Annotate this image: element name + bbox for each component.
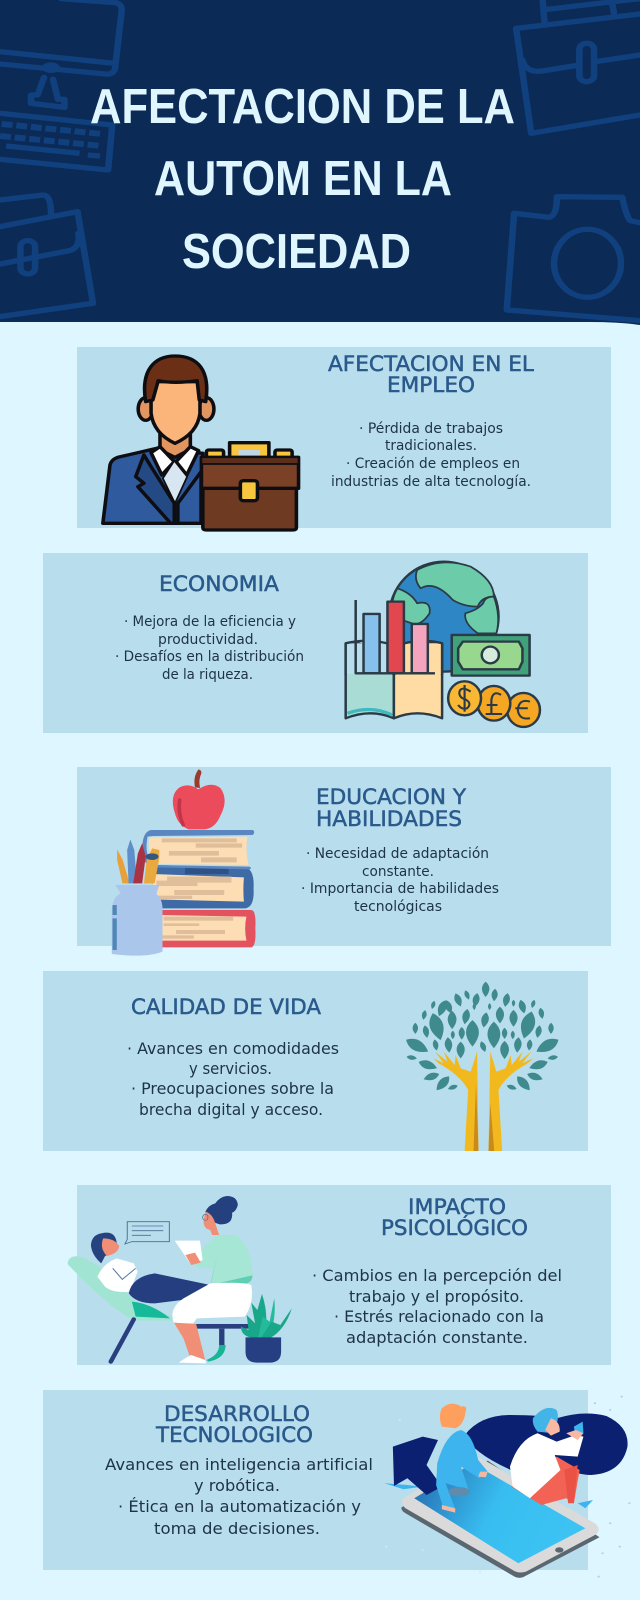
icon: therapist and patient [68,1196,292,1363]
heading: EDUCACION Y [316,785,467,810]
text block: · Estrés relacionado con la [334,1308,544,1326]
text block: · Cambios en la percepción del [312,1267,562,1285]
text block: adaptación constante. [346,1329,528,1347]
text block [105,1456,373,1538]
heading [155,1402,313,1448]
title [90,79,515,279]
icon: people on a smartphone [384,1396,631,1578]
panel: economia [43,553,588,733]
heading [328,352,534,398]
text block [127,1040,339,1119]
heading: CALIDAD DE VIDA [131,995,321,1020]
title: AUTOM EN LA [154,151,452,206]
text block: brecha digital y acceso. [139,1101,323,1119]
text block: · Desafíos en la distribución [115,649,304,665]
text block: · Creación de empleos en [346,456,520,472]
title: SOCIEDAD [182,224,411,279]
text block: · Necesidad de adaptación [306,846,489,862]
heading: DESARROLLO [164,1402,310,1427]
heading: AFECTACION EN EL [328,352,534,377]
heading: EMPLEO [387,373,475,398]
text block [115,614,304,683]
text block: Avances en inteligencia artificial [105,1456,373,1474]
header banner [0,0,640,325]
text block: y servicios. [189,1060,272,1078]
title: AFECTACION DE LA [90,79,515,134]
text block: tradicionales. [385,438,477,454]
header background icons [0,0,640,321]
heading: PSICOLÓGICO [381,1215,528,1241]
text block: productividad. [158,632,258,648]
text block: · Importancia de habilidades [301,881,499,897]
text block [312,1267,562,1347]
heading: HABILIDADES [316,807,462,832]
icon: books, apple and pencils [112,769,256,956]
text block [331,421,531,490]
text block: tecnológicas [354,899,442,915]
icon: globe, chart, money [346,562,540,727]
panel: afectacion en el empleo [77,347,611,530]
text block: · Mejora de la eficiencia y [124,614,296,630]
text block: y robótica. [194,1477,280,1495]
panel: desarrollo tecnologico [43,1390,631,1578]
text block: de la riqueza. [162,667,253,683]
heading: IMPACTO [408,1195,506,1220]
text block: industrias de alta tecnología. [331,474,531,490]
panel: impacto psicologico [68,1185,611,1365]
icon: tree with hands [403,982,561,1151]
icon: businessman with briefcase [103,356,299,530]
panel: calidad de vida [43,971,588,1151]
heading: ECONOMIA [159,572,279,597]
heading: TECNOLOGICO [155,1423,313,1448]
text block: · Ética en la automatización y [118,1497,361,1516]
text block: toma de decisiones. [154,1520,320,1538]
heading [316,785,467,832]
text block: trabajo y el propósito. [349,1288,524,1306]
panel: educacion y habilidades [77,767,611,956]
text block: · Avances en comodidades [127,1040,339,1058]
text block: · Pérdida de trabajos [359,421,503,437]
heading [381,1195,528,1241]
text block [301,846,499,915]
text block: · Preocupaciones sobre la [131,1080,334,1098]
text block: constante. [362,864,434,880]
